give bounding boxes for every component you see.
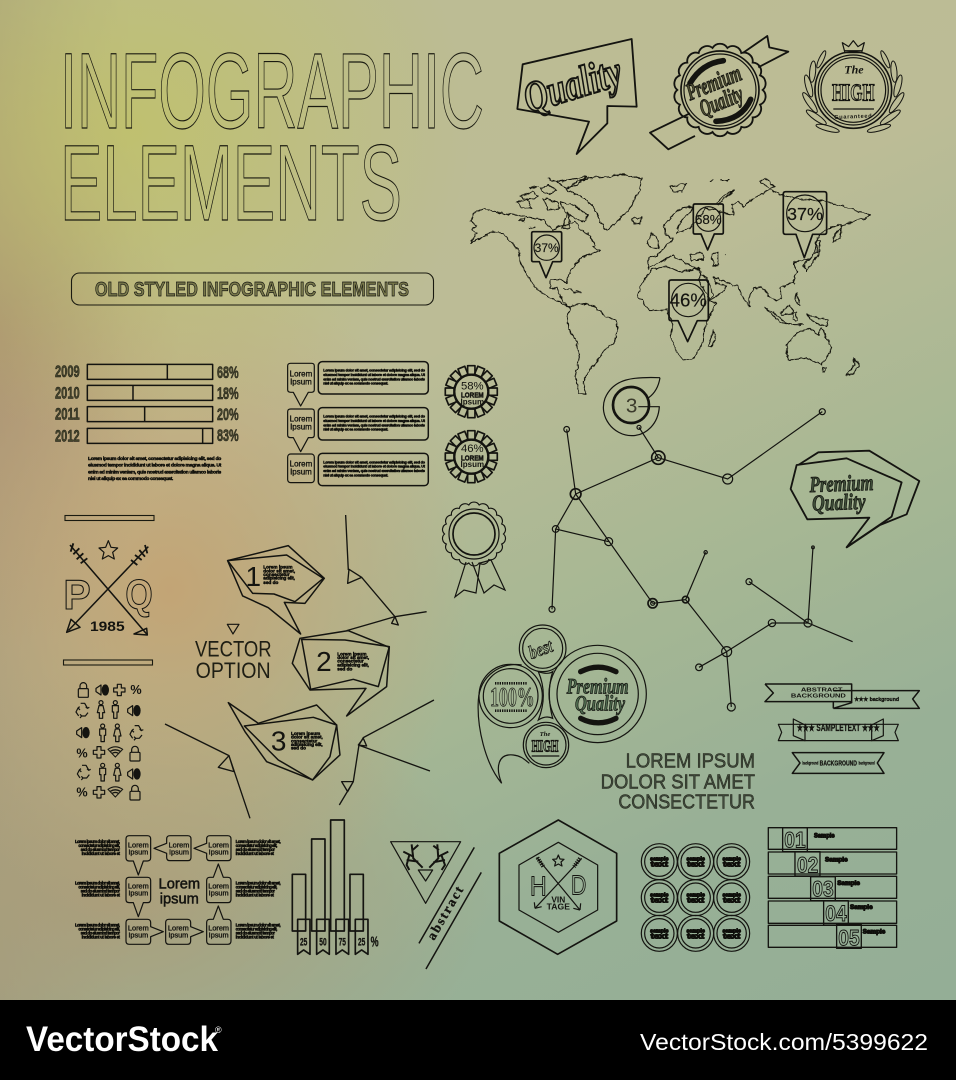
flow diagram: ipsum — [160, 892, 199, 908]
column chart with ribbons — [292, 820, 379, 954]
flow diagram: Lorem — [128, 924, 149, 933]
pin 37% americas: 37% — [535, 241, 559, 255]
HD vintage hexagon — [499, 820, 617, 954]
gauges: Ipsum — [461, 397, 484, 406]
origami bubble 3: Lorem ipsum — [291, 731, 320, 736]
sample circles grid: sample — [650, 928, 669, 934]
bar chart caption: enim ad minim veniam, quis nostrud exercitation ullamco laboris — [88, 469, 222, 475]
crown — [842, 41, 864, 53]
flow diagram: incididunt ut labore et — [236, 935, 275, 940]
callout list with pins: eiusmod tempor incididunt ut labore et dolore magna aliqua. Ut — [323, 373, 426, 377]
sample circles grid: text — [651, 931, 669, 940]
lorem ipsum heading: LOREM IPSUM — [626, 749, 755, 772]
bar chart caption — [88, 456, 222, 482]
PQ 1985 emblem: 1985 — [90, 618, 125, 634]
bar chart: years: 2010 — [55, 383, 80, 402]
callout list with pins: Ipsum — [290, 468, 312, 477]
circle cluster badge — [478, 625, 646, 783]
origami bubble 2: sed do — [337, 667, 352, 672]
flow diagram: sed do eiusmod tempor — [81, 888, 120, 893]
map pins — [532, 192, 827, 342]
world map — [471, 174, 870, 394]
origami bubble 2: Lorem ipsum — [337, 651, 367, 656]
abstract deer triangle — [391, 842, 481, 969]
numbered steps 01-05 — [768, 828, 897, 951]
pin 68% europe: 68% — [695, 212, 722, 227]
flow diagram: consectetur adipisicing elit, — [78, 843, 120, 848]
origami bubble 2: adipisicing elit, — [337, 662, 369, 667]
flow diagram: Lorem — [208, 924, 229, 933]
bar chart: years: 2009 — [55, 362, 80, 381]
flow diagram: Lorem ipsum dolor sit amet, — [75, 923, 120, 928]
callout list with pins: Lorem ipsum dolor sit amet, consectetur adipisicing elit, sed do — [323, 415, 426, 419]
sample circles grid: sample — [650, 893, 669, 899]
flow diagram: Ipsum — [209, 931, 229, 940]
origami bubble 1: 1 — [246, 561, 261, 592]
badge: quality speech bubble — [517, 39, 637, 154]
bar chart caption: nisi ut aliquip ex ea commodo consequat. — [88, 476, 174, 482]
ribbon: abstract background: BACKGROUND — [791, 694, 846, 700]
HD vintage hexagon: VIN — [551, 894, 565, 904]
sample circles grid: sample — [650, 857, 669, 863]
gauges: LOREM — [461, 391, 484, 400]
flow diagram: sed do eiusmod tempor — [81, 847, 120, 852]
flow diagram: Ipsum — [128, 847, 148, 856]
pin 37% asia: 37% — [787, 204, 823, 224]
flow diagram: consectetur adipisicing elit, — [78, 927, 120, 932]
sample circles grid: sample — [686, 857, 705, 863]
abstract deer triangle: abstract — [424, 883, 466, 942]
origami bubble 1: sed do — [263, 580, 278, 585]
circle cluster badge: Quality — [575, 691, 625, 716]
origami bubble 2: 2 — [316, 646, 332, 677]
badge: premium quality seal: Premium — [682, 61, 745, 106]
callout list with pins: Lorem ipsum dolor sit amet, consectetur adipisicing elit, sed do — [323, 460, 426, 464]
flow diagram: Lorem ipsum dolor sit amet, — [236, 880, 281, 885]
award rosette — [443, 502, 505, 597]
flow diagram: sed do eiusmod tempor — [236, 931, 275, 936]
origami bubble 1: Lorem ipsum — [263, 565, 293, 570]
callout list with pins: Ipsum — [290, 378, 312, 387]
callout list with pins: Ipsum — [290, 422, 312, 431]
bar chart: years: 68% — [217, 363, 239, 382]
divider bar top — [65, 516, 154, 520]
numbered steps 01-05: 03 — [812, 877, 834, 902]
numbered steps 01-05: Sample — [850, 905, 873, 911]
flow diagram: Lorem ipsum dolor sit amet, — [236, 839, 281, 844]
flow diagram: Lorem — [168, 924, 189, 933]
numbered steps 01-05: Sample — [863, 929, 886, 935]
sample circles grid: sample — [722, 857, 741, 863]
ribbon: sample text — [778, 719, 898, 741]
flow diagram: Ipsum — [209, 889, 229, 898]
numbered steps 01-05: 05 — [838, 926, 860, 951]
bar chart: years: 2011 — [55, 405, 80, 424]
column chart with ribbons: 25 — [300, 936, 307, 948]
laurel — [801, 50, 906, 134]
lorem ipsum heading: CONSECTETUR — [618, 791, 755, 814]
column chart with ribbons: 75 — [339, 936, 346, 948]
callout list with pins: eiusmod tempor incididunt ut labore et dolore magna aliqua. Ut — [323, 465, 426, 469]
ribbon: sample text: ★★★ SAMPLETEXT ★★★ — [797, 723, 880, 734]
bar chart: years: 18% — [217, 384, 239, 403]
ribbon: abstract background: ★★★ background — [854, 696, 899, 703]
gauges — [445, 366, 497, 483]
callout list with pins: nisi ut aliquip ex ea commodo consequat. — [323, 382, 388, 386]
bar chart: years: 83% — [217, 426, 239, 445]
title: ELEMENTS — [60, 122, 402, 243]
vector option label: VECTOR — [195, 637, 272, 662]
origami bubble 2: dolor sit amet, — [337, 655, 369, 660]
abstract angular lines — [165, 515, 434, 818]
flow diagram: Ipsum — [169, 847, 189, 856]
badge: premium quality seal — [650, 36, 788, 149]
callout list with pins: enim ad minim veniam, quis nostrud exercitation ullamco laboris — [323, 469, 425, 473]
flow diagram: incididunt ut labore et — [236, 851, 275, 856]
origami bubble 2 — [292, 631, 389, 716]
origami bubble 3: dolor sit amet, — [291, 735, 323, 740]
swirl icon with number 3 — [603, 377, 660, 436]
premium quality speech bubble: Quality — [812, 489, 867, 516]
origami bubble 1 — [228, 546, 324, 634]
ribbon: background: background — [859, 760, 875, 765]
pin 68% europe — [693, 204, 723, 250]
flow diagram: Ipsum — [128, 931, 148, 940]
bar chart: years: 20% — [217, 405, 239, 424]
swirl icon with number 3: 3 — [626, 394, 637, 417]
callout list with pins: Lorem — [290, 370, 313, 379]
sample circles grid: text — [723, 860, 741, 869]
callout list with pins: Lorem ipsum dolor sit amet, consectetur adipisicing elit, sed do — [323, 369, 426, 373]
PQ 1985 emblem: P — [63, 571, 91, 618]
numbered steps 01-05: 04 — [825, 901, 847, 926]
sample circles grid: text — [651, 896, 669, 905]
sample circles grid: sample — [686, 893, 705, 899]
column chart with ribbons: 25 — [358, 936, 365, 948]
flow diagram: Lorem — [208, 840, 229, 849]
origami bubble 1: dolor sit amet, — [263, 568, 295, 573]
flow diagram: Lorem — [169, 840, 189, 849]
flow diagram: Ipsum — [128, 889, 148, 898]
gauges: Ipsum — [461, 460, 484, 469]
HD vintage hexagon: TAGE — [547, 902, 570, 912]
footer watermark band — [26, 1020, 928, 1059]
callout list with pins: nisi ut aliquip ex ea commodo consequat. — [323, 428, 388, 432]
flow diagram: Ipsum — [168, 931, 188, 940]
title: INFOGRAPHIC — [60, 30, 484, 151]
flow diagram: Lorem ipsum dolor sit amet, — [75, 880, 120, 885]
flow diagram: incididunt ut labore et — [236, 892, 275, 897]
flow diagram — [75, 836, 281, 944]
gauges: LOREM — [461, 453, 484, 462]
sample circles grid: sample — [722, 893, 741, 899]
gauges: 58% — [461, 380, 484, 392]
column chart with ribbons: 50 — [319, 936, 327, 948]
HD vintage hexagon: D — [571, 869, 586, 900]
bar chart caption: eiusmod tempor incididunt ut labore et dolore magna aliqua. Ut — [88, 463, 222, 469]
footer watermark band: ® — [215, 1025, 222, 1035]
sample circles grid: text — [723, 896, 741, 905]
callout list with pins — [288, 362, 428, 486]
origami bubble 1: consectetur — [263, 572, 290, 577]
premium quality speech bubble — [791, 451, 919, 547]
lorem ipsum heading: DOLOR SIT AMET — [601, 770, 755, 793]
flow diagram: consectetur adipisicing elit, — [236, 843, 277, 848]
flow diagram: Ipsum — [209, 847, 229, 856]
sample circles grid: sample — [686, 928, 705, 934]
premium quality speech bubble: Premium — [808, 470, 874, 497]
flow diagram: consectetur adipisicing elit, — [236, 884, 277, 889]
sample circles grid: text — [723, 931, 741, 940]
PQ 1985 emblem — [63, 541, 153, 635]
origami bubble 3: adipisicing elit, — [291, 742, 323, 747]
origami bubble 1: adipisicing elit, — [263, 576, 295, 581]
callout list with pins: Lorem — [290, 460, 313, 469]
circle cluster badge: best — [526, 636, 556, 664]
icon grid: % — [76, 746, 88, 760]
flow diagram: Lorem ipsum dolor sit amet, — [75, 839, 120, 844]
origami bubble 3: consectetur — [291, 738, 318, 743]
flow diagram: consectetur adipisicing elit, — [236, 927, 277, 932]
numbered steps 01-05: Sample — [825, 858, 848, 864]
flow diagram: Lorem — [208, 882, 229, 891]
numbered steps 01-05: 02 — [797, 853, 818, 878]
badge: the high guaranteed: The — [844, 62, 864, 76]
sample circles grid: sample — [722, 928, 741, 934]
bar chart: years — [55, 362, 239, 482]
footer watermark band: VectorStock.com/5399622 — [640, 1029, 928, 1055]
icon grid: % — [130, 683, 142, 697]
callout list with pins: eiusmod tempor incididunt ut labore et dolore magna aliqua. Ut — [323, 419, 426, 423]
HD vintage hexagon: H — [530, 871, 547, 902]
vector option label: OPTION — [196, 658, 271, 683]
origami bubble 3: sed do — [291, 746, 306, 751]
origami bubble 2: consectetur — [337, 659, 364, 664]
badge: the high guaranteed: Guaranteed — [834, 114, 872, 121]
icon grid: % — [76, 786, 88, 800]
circle cluster badge: The — [540, 731, 550, 738]
flow diagram: Lorem — [128, 882, 149, 891]
circle cluster badge: HIGH — [532, 737, 558, 756]
lorem ipsum heading — [601, 749, 755, 814]
sample circles grid: text — [687, 860, 705, 869]
flow diagram: Lorem ipsum dolor sit amet, — [236, 923, 281, 928]
badge: the high guaranteed — [801, 41, 906, 134]
PQ 1985 emblem: Q — [125, 571, 153, 618]
sample circles grid: text — [651, 860, 669, 869]
flow diagram: Lorem — [128, 840, 149, 849]
numbered steps 01-05: Sample — [814, 834, 835, 840]
ribbon: background: BACKGROUND — [820, 758, 857, 767]
pin 46% africa — [669, 280, 708, 342]
flow diagram: incididunt ut labore et — [82, 892, 121, 897]
origami bubble 3: 3 — [271, 726, 286, 757]
pin 37% asia — [783, 192, 827, 258]
flow diagram: incididunt ut labore et — [82, 851, 121, 856]
badge: quality speech bubble: Quality — [518, 47, 628, 123]
numbered steps 01-05: 01 — [784, 828, 806, 853]
title — [60, 30, 484, 243]
flow diagram: sed do eiusmod tempor — [81, 931, 120, 936]
callout list with pins: enim ad minim veniam, quis nostrud exercitation ullamco laboris — [323, 423, 425, 427]
numbered steps 01-05: Sample — [837, 881, 861, 887]
ribbon: background: background — [802, 760, 818, 765]
column chart with ribbons: % — [371, 934, 379, 950]
pin 37% americas — [532, 232, 562, 278]
flow diagram: consectetur adipisicing elit, — [78, 884, 120, 889]
circle cluster badge: Premium — [566, 673, 629, 698]
callout list with pins: enim ad minim veniam, quis nostrud exercitation ullamco laboris — [323, 377, 425, 381]
footer watermark band: VectorStock — [26, 1020, 219, 1059]
ribbon: background — [792, 753, 884, 773]
sample circles grid — [641, 844, 750, 951]
origami bubble 3 — [228, 703, 340, 780]
flow diagram: incididunt ut labore et — [82, 935, 121, 940]
callout list with pins: Lorem — [290, 414, 313, 423]
flow diagram: Lorem — [159, 876, 200, 892]
subtitle pill — [72, 273, 434, 305]
network diagram — [549, 409, 853, 711]
flow diagram: sed do eiusmod tempor — [236, 847, 275, 852]
badge: premium quality seal: Quality — [696, 81, 747, 122]
gauges: 46% — [461, 443, 484, 455]
bar chart: years: 2012 — [55, 426, 80, 445]
circle cluster badge: 100% — [490, 682, 535, 712]
callout list with pins: nisi ut aliquip ex ea commodo consequat. — [323, 473, 388, 477]
pin 46% africa: 46% — [670, 290, 707, 311]
sample circles grid: text — [687, 896, 705, 905]
badge: the high guaranteed: HIGH — [832, 81, 875, 107]
divider bar bottom — [64, 660, 152, 665]
sample circles grid: text — [687, 931, 705, 940]
subtitle pill: OLD STYLED INFOGRAPHIC ELEMENTS — [95, 279, 409, 301]
ribbon: abstract background — [765, 684, 919, 708]
bar chart caption: Lorem ipsum dolor sit amet, consectetur adipisicing elit, sed do — [88, 456, 221, 462]
vector option label — [195, 624, 272, 683]
icon grid — [76, 683, 143, 800]
flow diagram: sed do eiusmod tempor — [236, 888, 275, 893]
ribbon: abstract background: ABSTRACT — [801, 687, 843, 693]
